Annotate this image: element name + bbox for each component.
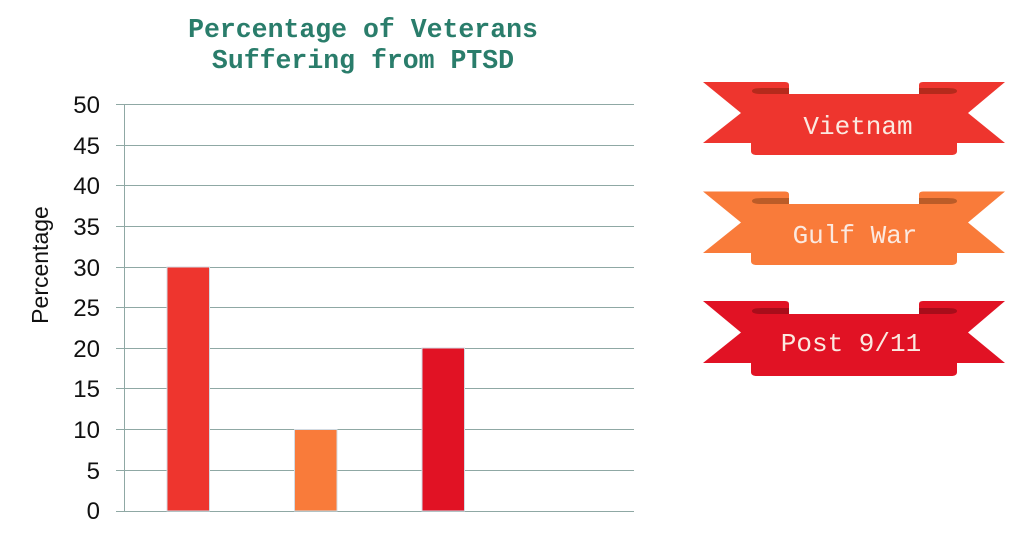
y axis tick labels: 45 bbox=[73, 133, 100, 160]
y axis tick labels: 15 bbox=[73, 376, 100, 403]
bar: Post 9/11 20 bbox=[422, 348, 464, 511]
title: Percentage of Veterans bbox=[188, 15, 538, 45]
bar: Vietnam 30 bbox=[167, 267, 210, 511]
bar: Gulf War 10 bbox=[294, 430, 337, 511]
ribbon: Vietnam: Vietnam bbox=[803, 112, 913, 142]
y axis tick labels: 40 bbox=[73, 173, 100, 200]
ribbon: Post 9/11 bbox=[703, 301, 1005, 376]
y axis tick labels: 5 bbox=[87, 458, 100, 485]
y axis tick labels: 30 bbox=[73, 255, 100, 282]
gridlines and axis bbox=[116, 104, 634, 512]
y axis tick labels bbox=[73, 92, 100, 525]
y axis title: Percentage bbox=[27, 206, 53, 324]
y axis tick labels: 0 bbox=[87, 498, 100, 525]
y axis tick labels: 10 bbox=[73, 417, 100, 444]
ribbon: Gulf War: Gulf War bbox=[793, 221, 917, 251]
y axis tick labels: 20 bbox=[73, 336, 100, 363]
bar chart bbox=[27, 92, 634, 525]
y axis tick labels: 25 bbox=[73, 295, 100, 322]
title: Suffering from PTSD bbox=[212, 46, 514, 76]
ribbon: Vietnam bbox=[703, 82, 1005, 155]
ribbon: Gulf War bbox=[703, 192, 1005, 265]
ribbon: Post 9/11: Post 9/11 bbox=[781, 329, 921, 359]
title bbox=[188, 15, 538, 76]
y axis tick labels: 35 bbox=[73, 214, 100, 241]
y axis tick labels: 50 bbox=[73, 92, 100, 119]
